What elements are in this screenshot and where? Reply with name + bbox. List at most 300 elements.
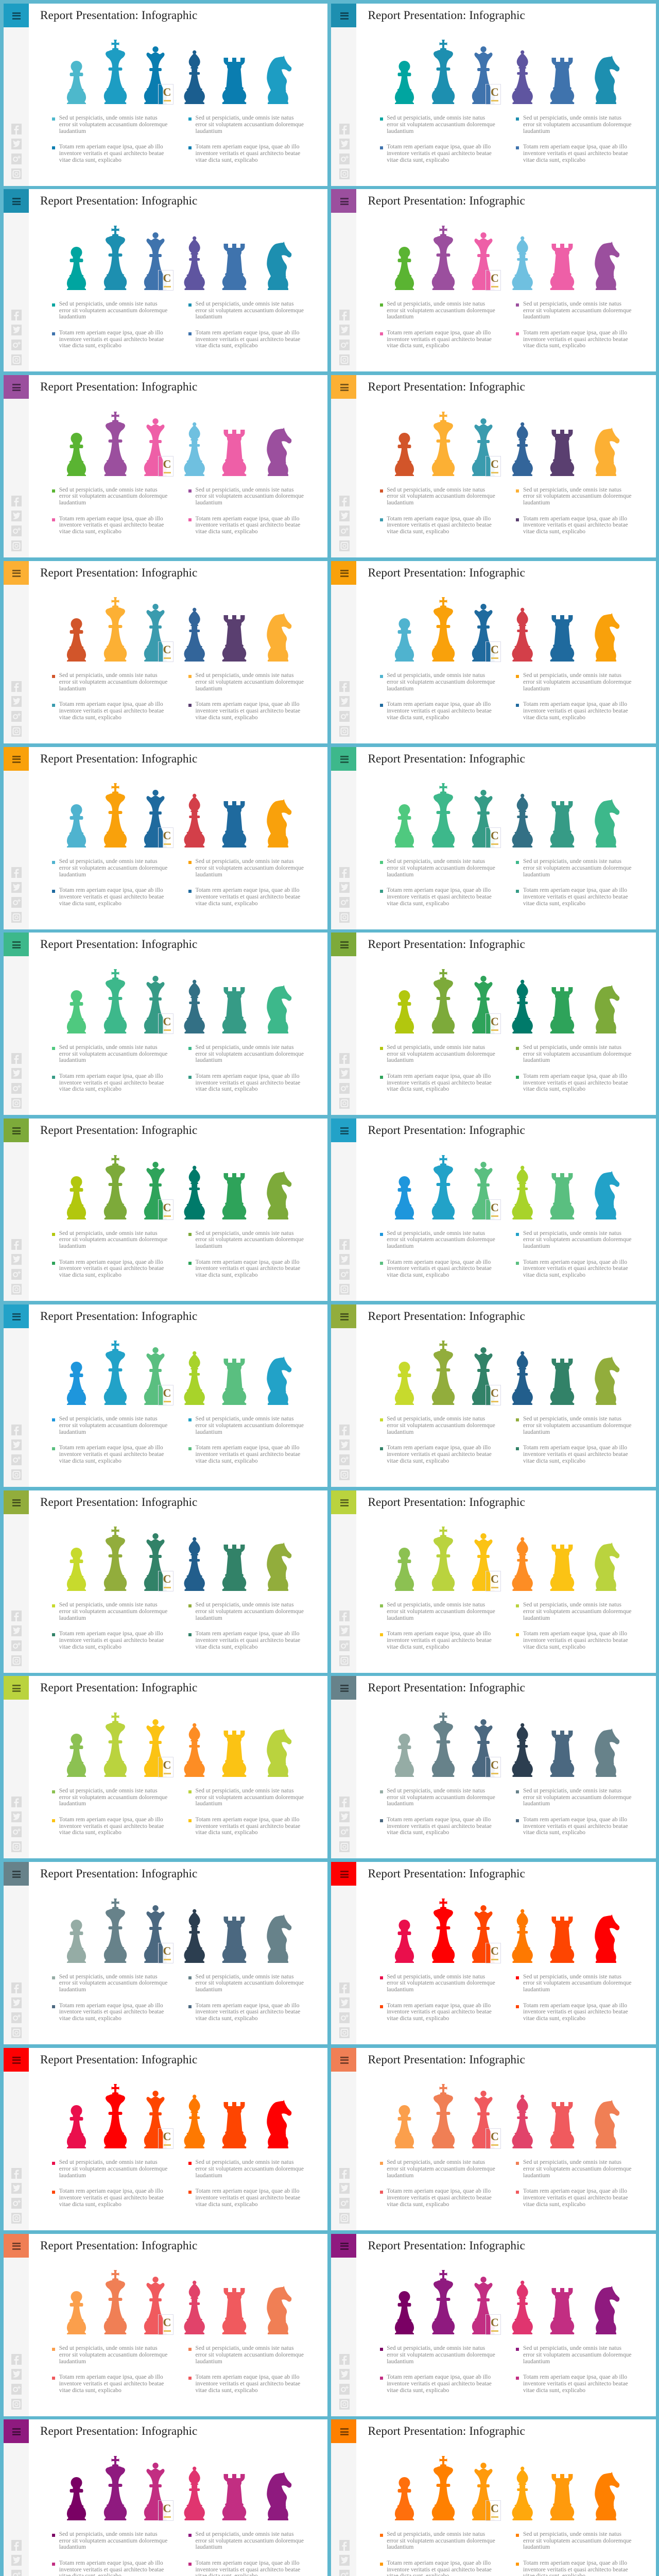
- text block: Totam rem aperiam eaque ipsa, quae ab illo: [196, 143, 300, 150]
- text block: inventore veritatis et quasi architecto beatae: [59, 2566, 164, 2573]
- social icons: [339, 2354, 349, 2410]
- panel: slide 19: [3, 1676, 327, 1858]
- text block: error sit voluptatem accusantium doloremque: [387, 1236, 495, 1243]
- text block: laudantium: [196, 2358, 222, 2365]
- menu header block: [331, 747, 356, 771]
- text block: [387, 672, 495, 692]
- pawn: [394, 61, 414, 104]
- title: Report Presentation: Infographic: [40, 1124, 197, 1137]
- text block: inventore veritatis et quasi architecto beatae: [523, 336, 628, 343]
- watermark: [158, 270, 173, 291]
- watermark: C: [163, 1015, 171, 1028]
- watermark: [485, 2500, 501, 2521]
- social icons: [339, 2168, 349, 2224]
- text block: inventore veritatis et quasi architecto beatae: [196, 2566, 300, 2573]
- text block: Sed ut perspiciatis, unde omnis iste natus: [196, 2159, 293, 2165]
- text block: [59, 1602, 167, 1621]
- text block: [59, 1445, 164, 1465]
- text block: inventore veritatis et quasi architecto beatae: [523, 1265, 628, 1272]
- text block: Sed ut perspiciatis, unde omnis iste natus: [523, 1787, 621, 1794]
- text block: error sit voluptatem accusantium doloremque: [387, 121, 495, 128]
- text block: vitae dicta sunt, explicabo: [59, 2201, 122, 2208]
- chess pieces chart: [394, 1341, 620, 1405]
- text block: laudantium: [387, 1800, 413, 1807]
- text block: inventore veritatis et quasi architecto beatae: [196, 2194, 300, 2201]
- text block: Sed ut perspiciatis, unde omnis iste natus: [523, 114, 621, 121]
- text block: Totam rem aperiam eaque ipsa, quae ab illo: [387, 2002, 491, 2009]
- text block: vitae dicta sunt, explicabo: [523, 342, 585, 349]
- text block: inventore veritatis et quasi architecto beatae: [523, 2380, 628, 2387]
- text block: inventore veritatis et quasi architecto beatae: [387, 2566, 492, 2573]
- text block: [59, 301, 167, 320]
- social icons: [11, 310, 22, 365]
- text block: Sed ut perspiciatis, unde omnis iste natus: [196, 672, 293, 679]
- watermark: [485, 1013, 501, 1034]
- text block: Totam rem aperiam eaque ipsa, quae ab illo: [59, 143, 163, 150]
- text block: Totam rem aperiam eaque ipsa, quae ab illo: [523, 2560, 627, 2566]
- text block: [523, 1974, 632, 1993]
- text block: laudantium: [523, 685, 550, 692]
- watermark: C: [163, 1944, 171, 1957]
- text block: Totam rem aperiam eaque ipsa, quae ab illo: [196, 515, 300, 522]
- rook: [550, 1173, 574, 1219]
- text block: laudantium: [59, 1243, 86, 1249]
- text block: error sit voluptatem accusantium doloremque: [196, 679, 304, 685]
- text block: inventore veritatis et quasi architecto beatae: [196, 336, 300, 343]
- rook: [550, 2474, 574, 2520]
- pawn: [67, 1920, 86, 1963]
- text block: inventore veritatis et quasi architecto beatae: [387, 1451, 492, 1458]
- text block: [59, 2188, 164, 2208]
- text block: Sed ut perspiciatis, unde omnis iste natus: [59, 1415, 158, 1422]
- rook: [550, 987, 574, 1033]
- text block: [387, 887, 492, 907]
- watermark: C: [163, 829, 171, 842]
- chess pieces chart: [67, 969, 291, 1033]
- text block: inventore veritatis et quasi architecto beatae: [59, 2380, 164, 2387]
- text block: [387, 701, 492, 721]
- text block: [59, 1230, 167, 1250]
- title: Report Presentation: Infographic: [40, 938, 197, 951]
- text block: [387, 2188, 492, 2208]
- bishop: [512, 1537, 532, 1591]
- text block: laudantium: [59, 2544, 86, 2550]
- queen: [472, 2277, 495, 2334]
- text block: Sed ut perspiciatis, unde omnis iste natus: [196, 1973, 293, 1980]
- social icons: [11, 1611, 22, 1666]
- text block: inventore veritatis et quasi architecto beatae: [59, 1265, 164, 1272]
- watermark: [485, 270, 501, 291]
- text block: [59, 516, 164, 535]
- text block: vitae dicta sunt, explicabo: [196, 2387, 258, 2394]
- rook: [550, 2288, 574, 2334]
- king: [431, 783, 455, 848]
- pawn: [394, 618, 414, 662]
- text block: inventore veritatis et quasi architecto beatae: [523, 1823, 628, 1829]
- text block: inventore veritatis et quasi architecto beatae: [196, 1823, 300, 1829]
- text block: Totam rem aperiam eaque ipsa, quae ab illo: [59, 329, 163, 336]
- text block: vitae dicta sunt, explicabo: [196, 900, 258, 907]
- watermark: C: [163, 272, 171, 284]
- watermark: [485, 641, 501, 662]
- rook: [222, 2474, 246, 2520]
- panel: slide 8: [331, 561, 656, 743]
- text block: vitae dicta sunt, explicabo: [196, 342, 258, 349]
- social icons: [339, 867, 350, 923]
- text block: Sed ut perspiciatis, unde omnis iste natus: [523, 1601, 621, 1608]
- watermark: [485, 1571, 501, 1591]
- text block: laudantium: [196, 2172, 222, 2179]
- watermark: [158, 455, 173, 476]
- rook: [222, 987, 246, 1033]
- chess pieces chart: [379, 2266, 626, 2338]
- text block: inventore veritatis et quasi architecto beatae: [59, 1079, 164, 1086]
- bishop: [184, 1165, 205, 1219]
- watermark: [485, 1942, 501, 1963]
- social icons: [11, 1053, 22, 1109]
- text block: inventore veritatis et quasi architecto beatae: [387, 2008, 492, 2015]
- sidebar: [331, 1886, 356, 2044]
- watermark: C: [163, 1386, 171, 1399]
- chess pieces chart: [67, 783, 291, 848]
- watermark: C: [491, 1386, 499, 1399]
- text block: vitae dicta sunt, explicabo: [59, 342, 122, 349]
- text block: Totam rem aperiam eaque ipsa, quae ab illo: [196, 1073, 300, 1079]
- chess pieces chart: [394, 1155, 620, 1219]
- text block: inventore veritatis et quasi architecto beatae: [387, 1079, 492, 1086]
- social icons: [11, 681, 22, 737]
- text block: error sit voluptatem accusantium doloremque: [59, 1422, 167, 1429]
- text block: [523, 144, 628, 163]
- text block: error sit voluptatem accusantium doloremque: [59, 2351, 167, 2358]
- queen: [144, 604, 167, 662]
- title: Report Presentation: Infographic: [40, 1495, 197, 1509]
- text block: inventore veritatis et quasi architecto beatae: [387, 1823, 492, 1829]
- text block: vitae dicta sunt, explicabo: [523, 1643, 585, 1650]
- text block: laudantium: [523, 871, 550, 878]
- panel: slide 2: [331, 3, 656, 185]
- text block: [523, 2374, 628, 2394]
- queen: [144, 976, 167, 1033]
- pawn: [67, 1734, 86, 1777]
- bishop: [512, 1909, 532, 1963]
- text block: [59, 1631, 164, 1650]
- text block: inventore veritatis et quasi architecto beatae: [387, 893, 492, 900]
- sidebar: [3, 771, 29, 929]
- text block: vitae dicta sunt, explicabo: [387, 2201, 449, 2208]
- queen: [472, 604, 495, 662]
- chess pieces chart: [67, 1155, 291, 1219]
- text block: Totam rem aperiam eaque ipsa, quae ab illo: [387, 887, 491, 893]
- text block: [59, 1817, 164, 1836]
- panel: slide 12: [331, 933, 656, 1115]
- text block: vitae dicta sunt, explicabo: [59, 1643, 122, 1650]
- text block: error sit voluptatem accusantium doloremque: [196, 2537, 304, 2544]
- sidebar: [3, 2072, 29, 2230]
- title: Report Presentation: Infographic: [368, 8, 525, 22]
- text block: [59, 330, 164, 349]
- text block: vitae dicta sunt, explicabo: [387, 157, 449, 163]
- watermark: C: [491, 2502, 499, 2515]
- menu header block: [331, 1118, 356, 1142]
- text block: [59, 2531, 167, 2551]
- text block: Totam rem aperiam eaque ipsa, quae ab illo: [523, 887, 627, 893]
- text block: Sed ut perspiciatis, unde omnis iste natus: [387, 1787, 485, 1794]
- text block: inventore veritatis et quasi architecto beatae: [387, 2194, 492, 2201]
- text block: error sit voluptatem accusantium doloremque: [387, 1979, 495, 1986]
- watermark: C: [163, 1572, 171, 1585]
- bishop: [512, 50, 532, 104]
- text block: error sit voluptatem accusantium doloremque: [387, 1608, 495, 1615]
- king: [104, 1527, 127, 1591]
- text block: error sit voluptatem accusantium doloremque: [523, 2351, 632, 2358]
- watermark: [158, 641, 173, 662]
- bishop: [184, 608, 205, 662]
- title: Report Presentation: Infographic: [40, 2053, 197, 2066]
- queen: [144, 1161, 167, 1219]
- watermark: [485, 827, 501, 848]
- text block: [523, 2531, 632, 2551]
- text block: error sit voluptatem accusantium doloremque: [196, 307, 304, 314]
- rook: [222, 1359, 246, 1405]
- text block: inventore veritatis et quasi architecto beatae: [387, 1637, 492, 1643]
- rook: [222, 1917, 246, 1963]
- sidebar: [3, 1700, 29, 1858]
- panel: slide 18: [331, 1490, 656, 1672]
- text block: Sed ut perspiciatis, unde omnis iste natus: [59, 1601, 158, 1608]
- bishop: [512, 794, 532, 848]
- knight: [595, 1357, 619, 1405]
- text block: vitae dicta sunt, explicabo: [196, 714, 258, 721]
- social icons: [11, 1239, 22, 1295]
- text block: Sed ut perspiciatis, unde omnis iste natus: [59, 858, 158, 865]
- text block: laudantium: [387, 685, 413, 692]
- text block: [387, 1259, 492, 1279]
- text block: [196, 2531, 304, 2551]
- social icons: [339, 1797, 350, 1852]
- text block: vitae dicta sunt, explicabo: [523, 2015, 585, 2022]
- king: [104, 411, 127, 476]
- watermark: C: [163, 2130, 171, 2143]
- pawn: [394, 2477, 414, 2520]
- menu header block: [3, 189, 29, 213]
- rook: [222, 1545, 246, 1591]
- watermark: C: [163, 2316, 171, 2329]
- menu header block: [331, 1490, 356, 1514]
- king: [431, 226, 455, 290]
- text block: laudantium: [523, 2172, 550, 2179]
- watermark: C: [491, 829, 499, 842]
- pawn: [67, 433, 86, 476]
- pawn: [67, 2477, 86, 2520]
- text block: error sit voluptatem accusantium doloremque: [59, 2165, 167, 2172]
- text block: Sed ut perspiciatis, unde omnis iste natus: [59, 672, 158, 679]
- title: Report Presentation: Infographic: [368, 1867, 525, 1880]
- text block: error sit voluptatem accusantium doloremque: [523, 307, 632, 314]
- text block: inventore veritatis et quasi architecto beatae: [523, 893, 628, 900]
- text block: [523, 487, 632, 506]
- pawn: [394, 1920, 414, 1963]
- text block: Sed ut perspiciatis, unde omnis iste natus: [196, 486, 293, 493]
- watermark: [158, 1571, 173, 1591]
- panel: slide 13: [3, 1118, 327, 1301]
- menu header block: [3, 1676, 29, 1700]
- social icons: [11, 2168, 22, 2224]
- text block: inventore veritatis et quasi architecto beatae: [196, 893, 300, 900]
- title: Report Presentation: Infographic: [368, 1124, 525, 1137]
- watermark: [485, 1757, 501, 1777]
- panel: slide 23: [3, 2048, 327, 2230]
- text block: Sed ut perspiciatis, unde omnis iste natus: [387, 858, 485, 865]
- text block: Totam rem aperiam eaque ipsa, quae ab illo: [59, 2188, 163, 2194]
- text block: Totam rem aperiam eaque ipsa, quae ab illo: [387, 2374, 491, 2380]
- text block: vitae dicta sunt, explicabo: [59, 714, 122, 721]
- knight: [267, 985, 291, 1033]
- social icons: [11, 1425, 22, 1480]
- panel: slide 21: [3, 1862, 327, 2044]
- knight: [595, 1543, 619, 1591]
- king: [104, 1713, 127, 1777]
- text block: [196, 144, 300, 163]
- menu header block: [3, 2048, 29, 2072]
- chess pieces chart: [51, 2080, 299, 2153]
- text block: Sed ut perspiciatis, unde omnis iste natus: [196, 1787, 293, 1794]
- watermark: C: [491, 2316, 499, 2329]
- text block: [387, 1230, 495, 1250]
- text block: error sit voluptatem accusantium doloremque: [196, 493, 304, 499]
- queen: [472, 1905, 495, 1963]
- text block: [387, 2159, 495, 2179]
- text block: vitae dicta sunt, explicabo: [59, 1458, 122, 1464]
- text block: Totam rem aperiam eaque ipsa, quae ab illo: [523, 701, 627, 707]
- text block: Totam rem aperiam eaque ipsa, quae ab illo: [523, 1073, 627, 1079]
- knight: [595, 1728, 619, 1777]
- text block: inventore veritatis et quasi architecto beatae: [523, 2566, 628, 2573]
- pawn: [394, 1362, 414, 1405]
- panel: slide 6: [331, 375, 656, 557]
- menu header block: [3, 1490, 29, 1514]
- sidebar: [331, 956, 356, 1115]
- text block: error sit voluptatem accusantium doloremque: [196, 1608, 304, 1615]
- text block: Totam rem aperiam eaque ipsa, quae ab illo: [387, 701, 491, 707]
- bishop: [184, 794, 205, 848]
- knight: [595, 2472, 619, 2520]
- watermark: [485, 1199, 501, 1220]
- knight: [267, 799, 291, 848]
- text block: Totam rem aperiam eaque ipsa, quae ab illo: [523, 1630, 627, 1637]
- text block: laudantium: [523, 313, 550, 320]
- bishop: [512, 1723, 532, 1777]
- text block: laudantium: [387, 871, 413, 878]
- text block: inventore veritatis et quasi architecto beatae: [196, 1079, 300, 1086]
- text block: inventore veritatis et quasi architecto beatae: [59, 2008, 164, 2015]
- text block: inventore veritatis et quasi architecto beatae: [59, 150, 164, 157]
- text block: Sed ut perspiciatis, unde omnis iste natus: [523, 672, 621, 679]
- text block: Totam rem aperiam eaque ipsa, quae ab illo: [523, 1816, 627, 1823]
- text block: [59, 672, 167, 692]
- text block: vitae dicta sunt, explicabo: [196, 1643, 258, 1650]
- queen: [472, 1347, 495, 1405]
- menu header block: [331, 1304, 356, 1328]
- chess pieces chart: [67, 1527, 291, 1591]
- pawn: [67, 618, 86, 662]
- text block: inventore veritatis et quasi architecto beatae: [196, 1451, 300, 1458]
- text block: [59, 2003, 164, 2022]
- queen: [472, 1719, 495, 1777]
- social icons: [339, 681, 350, 737]
- text block: Sed ut perspiciatis, unde omnis iste natus: [196, 858, 293, 865]
- text block: inventore veritatis et quasi architecto beatae: [523, 2008, 628, 2015]
- menu header block: [331, 1676, 356, 1700]
- text block: [59, 2560, 164, 2576]
- text block: laudantium: [59, 685, 86, 692]
- watermark: C: [491, 643, 499, 656]
- panel: slide 17: [3, 1490, 327, 1672]
- king: [104, 969, 127, 1033]
- text block: error sit voluptatem accusantium doloremque: [59, 2537, 167, 2544]
- title: Report Presentation: Infographic: [40, 1310, 197, 1323]
- text block: laudantium: [523, 2544, 550, 2550]
- text block: error sit voluptatem accusantium doloremque: [387, 2537, 495, 2544]
- text block: [523, 330, 628, 349]
- watermark: [485, 84, 501, 105]
- sidebar: [3, 213, 29, 371]
- title: Report Presentation: Infographic: [368, 566, 525, 580]
- text block: [196, 1788, 304, 1807]
- text block: [196, 2345, 304, 2365]
- social icons: [339, 496, 350, 551]
- text block: [523, 301, 632, 320]
- text block: error sit voluptatem accusantium doloremque: [523, 493, 632, 499]
- text block: [59, 1044, 167, 1064]
- pawn: [394, 990, 414, 1033]
- text block: laudantium: [196, 313, 222, 320]
- text block: inventore veritatis et quasi architecto beatae: [523, 150, 628, 157]
- sidebar: [3, 1142, 29, 1301]
- watermark: [158, 2500, 173, 2521]
- text block: vitae dicta sunt, explicabo: [387, 1643, 449, 1650]
- panel: slide 1: [3, 3, 327, 185]
- text block: [387, 115, 495, 134]
- text block: inventore veritatis et quasi architecto beatae: [387, 150, 492, 157]
- knight: [595, 1914, 619, 1963]
- text block: vitae dicta sunt, explicabo: [59, 2387, 122, 2394]
- text block: [523, 1788, 632, 1807]
- watermark: [158, 1013, 173, 1034]
- social icons: [339, 1611, 350, 1666]
- king: [431, 1898, 455, 1963]
- text block: vitae dicta sunt, explicabo: [196, 528, 258, 535]
- king: [104, 226, 127, 290]
- bishop: [184, 2095, 205, 2148]
- text block: [196, 1259, 300, 1279]
- chess pieces chart: [379, 1895, 626, 1967]
- text block: Totam rem aperiam eaque ipsa, quae ab illo: [387, 1073, 491, 1079]
- text block: laudantium: [196, 685, 222, 692]
- text block: Sed ut perspiciatis, unde omnis iste natus: [387, 2159, 485, 2165]
- text block: error sit voluptatem accusantium doloremque: [523, 865, 632, 871]
- text block: [523, 887, 628, 907]
- text block: Sed ut perspiciatis, unde omnis iste natus: [59, 2159, 158, 2165]
- text block: error sit voluptatem accusantium doloremque: [59, 865, 167, 871]
- chess pieces chart: [67, 1713, 291, 1777]
- text block: error sit voluptatem accusantium doloremque: [59, 1794, 167, 1801]
- text block: [59, 887, 164, 907]
- social icons: [11, 2540, 22, 2576]
- social icons: [339, 1425, 350, 1480]
- text block: [196, 887, 300, 907]
- text block: Totam rem aperiam eaque ipsa, quae ab illo: [59, 2002, 163, 2009]
